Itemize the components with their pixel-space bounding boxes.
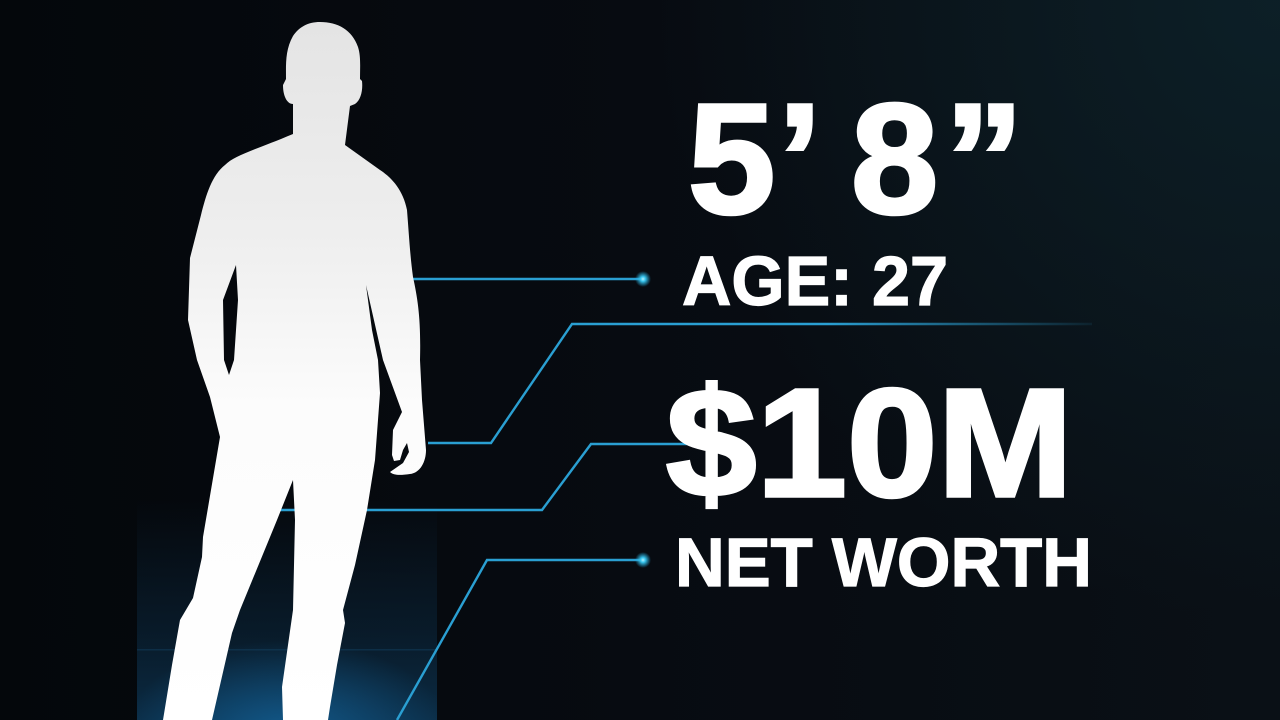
- line: net worth connector: [280, 444, 690, 510]
- net worth label: NET WORTH: [675, 524, 1092, 601]
- height value: ’: [778, 72, 822, 247]
- height value: 8: [851, 72, 938, 247]
- height value: ”: [945, 72, 1024, 247]
- node: lower connector dot: [635, 552, 651, 568]
- age label: AGE: 27: [682, 242, 948, 320]
- line: upper divider connector: [428, 324, 1092, 443]
- connector lines: [280, 279, 1092, 720]
- line: age connector: [410, 278, 643, 280]
- height value: 5: [688, 72, 775, 247]
- net worth value: $10M: [666, 357, 1073, 529]
- silhouette of standing man: [163, 22, 426, 720]
- floor glow: [137, 500, 437, 720]
- line: lower connector: [397, 560, 643, 720]
- node: age connector dot: [635, 271, 651, 287]
